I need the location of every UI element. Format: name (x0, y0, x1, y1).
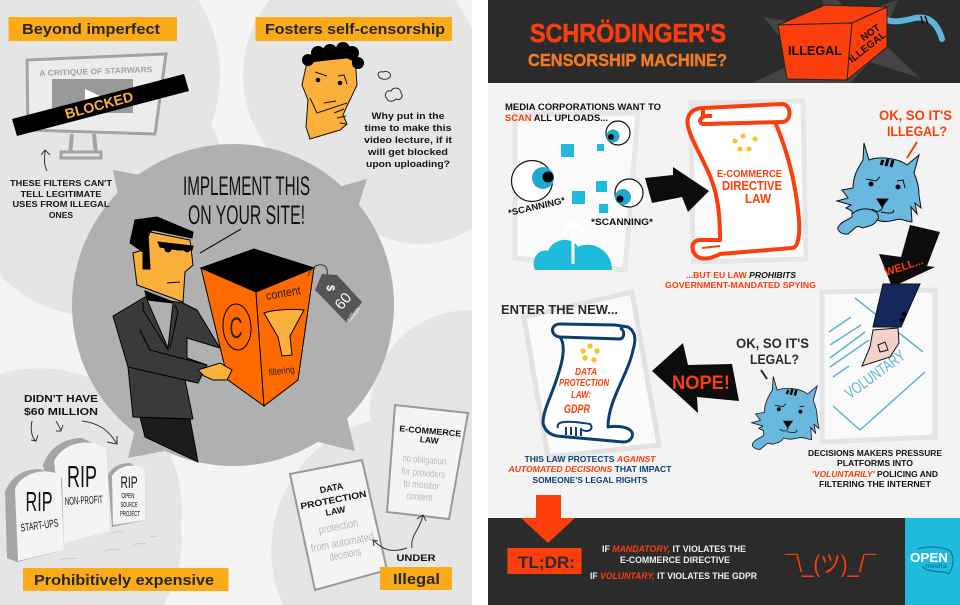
document: data protection law: decisions (329, 546, 362, 564)
speech line (907, 142, 917, 158)
panel: scanning paper (515, 113, 638, 270)
icon: blue cat bottom (752, 376, 819, 449)
icon: thought clouds (378, 71, 402, 101)
icon: content filter box: filtering (268, 364, 295, 379)
icon: RIP tombstones: NON-PROFIT (65, 494, 103, 508)
arrow: down to tldr (521, 495, 575, 543)
text: eu law prohibits: GOVERNMENT-MANDATED SPYING (665, 280, 816, 290)
label: tl;dr: TL;DR: (518, 553, 575, 572)
text: ok so it's legal (736, 335, 809, 367)
heading: Fosters self-censorship: Fosters self-censorship (265, 21, 445, 38)
panel: central speech bubble (72, 144, 394, 466)
text: decision makers caption: 'VOLUNTARILY' POLICING AND (812, 469, 938, 479)
document: e-commerce law: to monitor (403, 478, 440, 493)
panel: voluntary paper: VOLUNTARY (842, 347, 909, 402)
panel: left background (0, 0, 570, 605)
title (528, 18, 727, 70)
title: CENSORSHIP MACHINE? (528, 50, 727, 70)
title: SCHRÖDINGER'S (530, 18, 726, 48)
icon: illegal not-illegal box with tail: ILLEGAL (788, 44, 842, 58)
panel: voluntary paper (822, 290, 935, 442)
icon: RIP tombstones (5, 438, 157, 562)
heading: Prohibitively expensive (23, 568, 228, 591)
text: filters caption: THESE FILTERS CAN'T (10, 178, 113, 188)
document: e-commerce law: E-COMMERCE (399, 423, 462, 439)
text: decision makers caption: FILTERING THE INTERNET (819, 479, 932, 489)
text: didn't have $60 million (24, 394, 98, 418)
panel: header (488, 0, 960, 83)
heading: Beyond imperfect (8, 17, 177, 41)
icon: upload cloud (534, 222, 612, 270)
icon: RIP tombstones: RIP (67, 459, 97, 494)
icon: price tag $60 million: million (345, 306, 362, 325)
icon: three eyes (512, 121, 643, 207)
text: gdpr caption: THIS LAW PROTECTS AGAINST (524, 454, 656, 464)
panel: gdpr scroll: PROTECTION (559, 378, 610, 389)
text: media corporations: MEDIA CORPORATIONS WANT TO (505, 102, 661, 113)
arrow: nope (652, 343, 739, 413)
arrow: well (879, 225, 940, 287)
text: decision makers caption: PLATFORMS INTO (837, 458, 913, 468)
document: data protection law: PROTECTION (300, 489, 367, 511)
heading: Fosters self-censorship (256, 17, 452, 41)
text: self-censorship question: video lecture, if it (364, 135, 453, 146)
text: ok so it's illegal: ILLEGAL? (887, 123, 947, 139)
document: data protection law: protection (318, 517, 359, 537)
text: self-censorship question: time to make this (364, 123, 452, 134)
text: didn't have $60 million: $60 MILLION (24, 407, 98, 418)
heading: Beyond imperfect: Beyond imperfect (22, 21, 160, 38)
text: didn't have $60 million: DIDN'T HAVE (24, 394, 98, 405)
icon: blue cat top (837, 143, 921, 234)
icon: thinking man (302, 42, 364, 139)
panel: gdpr scroll: GDPR (564, 402, 590, 416)
heading: Illegal (380, 567, 452, 590)
panel: e-commerce directive scroll (688, 101, 806, 262)
text: tldr summary: E-COMMERCE DIRECTIVE (620, 555, 730, 565)
panel: gdpr scroll: DATA (575, 367, 597, 378)
document: data protection law: LAW (325, 504, 347, 518)
arrow: to e-commerce directive (645, 167, 709, 212)
text: gdpr caption: SOMEONE'S LEGAL RIGHTS (532, 475, 648, 485)
document: e-commerce law: LAW (419, 434, 440, 446)
icon: pointing hand (862, 284, 920, 366)
text: filters caption: ONES (49, 210, 73, 220)
icon: blocked video monitor: A CRITIQUE OF STARWARS (39, 65, 153, 78)
document: e-commerce law (387, 405, 468, 519)
text: filters caption (10, 178, 113, 220)
text: implement this on your site: ON YOUR SITE! (188, 200, 305, 230)
document: e-commerce law: for providers (401, 466, 446, 481)
logo: open media: OPEN (910, 551, 948, 565)
text: ok so it's legal: LEGAL? (750, 351, 799, 367)
text: scanning labels (507, 195, 654, 227)
icon: RIP tombstones: PROJECT (120, 511, 140, 518)
figure: man in suit (113, 217, 220, 462)
text: self-censorship question: Why put in the (372, 111, 444, 122)
icon: price tag $60 million: 60 (332, 289, 355, 313)
arrows: to graves (31, 421, 117, 444)
text: scanning labels: *SCANNING* (507, 195, 566, 218)
logo: open media: media (925, 564, 948, 570)
document: e-commerce law: content (406, 491, 433, 504)
label: tl;dr (508, 548, 582, 574)
icon: RIP tombstones: START-UPS (20, 517, 59, 535)
text: media corporations (505, 102, 661, 124)
text: ok so it's illegal: OK, SO IT'S (879, 107, 952, 123)
panel: footer (488, 518, 960, 605)
text: tldr summary: IF VOLUNTARY, IT VIOLATES THE GDPR (590, 571, 758, 581)
text: scanning labels: *SCANNING* (591, 217, 654, 227)
text: implement this on your site: IMPLEMENT THIS (183, 171, 310, 201)
document: data protection law: DATA (319, 481, 344, 495)
panel: gdpr scroll (524, 292, 659, 457)
icon: content filter box: content (265, 283, 302, 303)
icon: RIP tombstones: SOURCE (120, 502, 138, 509)
panel: e-commerce directive scroll: DIRECTIVE (722, 178, 782, 193)
heading: Prohibitively expensive: Prohibitively expensive (34, 572, 214, 589)
icon: illegal not-illegal box with tail: NOT (859, 23, 883, 44)
arrows: under (373, 515, 426, 550)
text: tldr summary: IF MANDATORY, IT VIOLATES THE (602, 544, 746, 554)
text: media corporations: SCAN ALL UPLOADS... (505, 113, 608, 124)
text: eu law prohibits: ...BUT EU LAW PROHIBITS (686, 270, 796, 280)
icon: RIP tombstones: RIP (120, 473, 138, 492)
icon: blocked video monitor: BLOCKED (63, 88, 135, 122)
panel: gdpr scroll: LAW: (571, 390, 591, 401)
text: self-censorship question: will get blocked (367, 147, 448, 158)
arrow: nope: NOPE! (672, 373, 730, 394)
panel: e-commerce directive scroll: LAW (745, 191, 772, 206)
arrow: to monitor (41, 150, 50, 171)
icon: pixel squares (561, 144, 608, 213)
text: self-censorship question: upon uploading? (366, 159, 450, 170)
speech line (761, 370, 767, 379)
text: eu law prohibits (665, 270, 816, 290)
text: gdpr caption: AUTOMATED DECISIONS THAT IMPACT (508, 464, 672, 474)
text: tldr summary (590, 544, 758, 581)
text: under: UNDER (396, 553, 436, 564)
text: filters caption: USES FROM ILLEGAL (12, 199, 110, 209)
panel: right background (488, 83, 960, 518)
icon: illegal not-illegal box with tail: ILLEGAL (847, 30, 888, 65)
document: e-commerce law: no obligation (402, 453, 447, 468)
document: data protection law: from automated (310, 531, 375, 555)
arrow: well: WELL... (883, 255, 925, 279)
logo: open media (910, 547, 953, 574)
heading: Illegal: Illegal (393, 571, 440, 588)
text: gdpr caption (508, 454, 672, 485)
icon: RIP tombstones: OPEN (122, 493, 134, 500)
text: decision makers caption: DECISIONS MAKERS PRESSURE (808, 448, 942, 458)
text: ok so it's legal: OK, SO IT'S (736, 335, 809, 351)
icon: blocked video monitor (12, 54, 189, 158)
icon: price tag $60 million (308, 265, 362, 325)
panel: e-commerce directive scroll: E-COMMERCE (717, 169, 782, 180)
text: self-censorship question (364, 111, 453, 170)
text: ok so it's illegal (879, 107, 952, 139)
icon: content filter box (198, 249, 314, 406)
icon: content filter box: C (230, 312, 242, 345)
speech line (200, 229, 241, 253)
text: shrug: ¯\_(ツ)_/¯ (784, 551, 877, 578)
text: enter the new: ENTER THE NEW... (501, 303, 618, 317)
icon: price tag $60 million: $ (324, 285, 336, 291)
icon: illegal not-illegal box with tail (778, 5, 942, 80)
icon: RIP tombstones: RIP (26, 486, 52, 517)
text: filters caption: TELL LEGITIMATE (20, 189, 102, 199)
document: data protection law (290, 460, 387, 590)
text: implement this on your site (183, 171, 310, 230)
text: decision makers caption (808, 448, 942, 489)
